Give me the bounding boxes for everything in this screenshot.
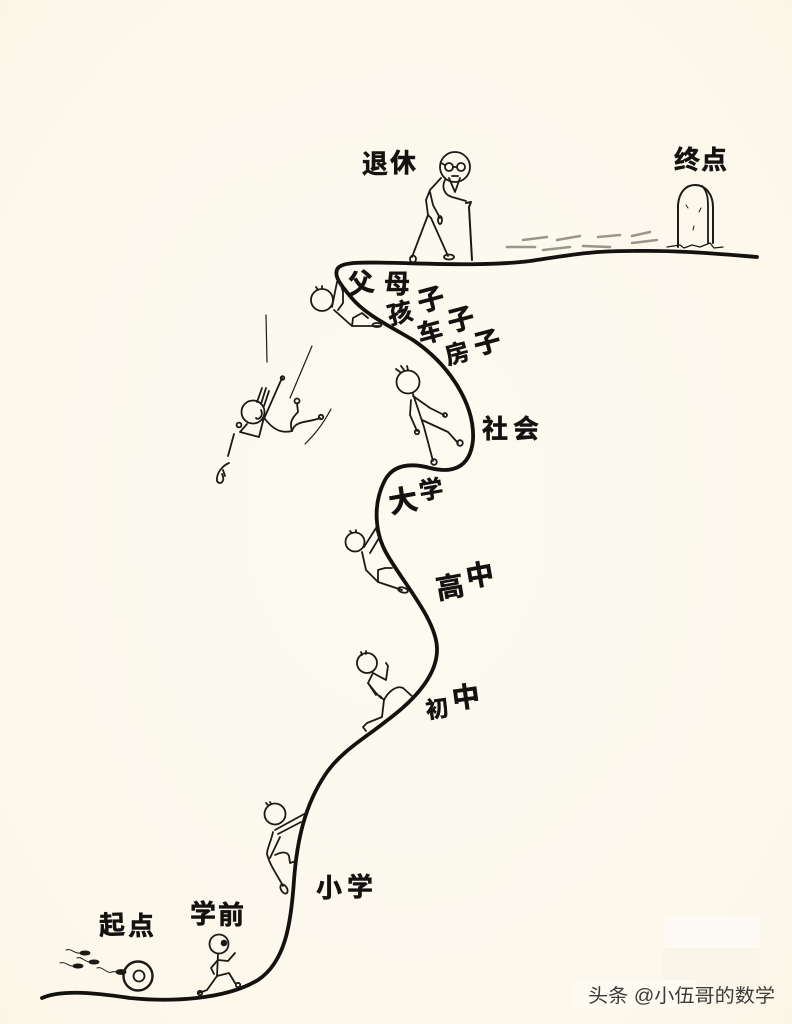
start label 起点: 起 xyxy=(98,910,126,940)
retirement label 退休: 休 xyxy=(390,148,416,178)
senior high label 高中: 中 xyxy=(463,558,496,593)
end label 终点: 点 xyxy=(701,145,727,175)
parents label 父母: 父 xyxy=(346,266,376,300)
child label 孩子 xyxy=(385,282,448,331)
parents label 父母 xyxy=(346,266,410,300)
start label 起点 xyxy=(98,910,154,941)
car label 车子: 子 xyxy=(444,302,478,338)
watermark text: 头条 @小伍哥的数学 xyxy=(588,985,775,1007)
retirement label 退休: 退 xyxy=(362,149,388,179)
junior high label 初中: 中 xyxy=(450,680,482,715)
society label 社会 xyxy=(482,414,539,444)
house label 房子 xyxy=(442,325,504,371)
watermark patches xyxy=(572,915,760,1008)
main life curve xyxy=(42,251,757,1000)
preschool label 学前 xyxy=(190,899,244,930)
icon: egg and sperm xyxy=(60,950,152,990)
figure: junior high climber xyxy=(357,651,413,731)
end label 终点: 终 xyxy=(674,145,700,175)
figure: senior high climber xyxy=(346,528,408,594)
university label 大学: 大 xyxy=(386,483,420,520)
primary school label 小学: 学 xyxy=(347,872,373,902)
preschool label 学前: 学 xyxy=(190,899,216,929)
university label 大学: 学 xyxy=(417,475,445,506)
society label 社会: 社 xyxy=(482,414,508,444)
start label 起点: 点 xyxy=(128,911,154,941)
figure: falling person xyxy=(217,315,331,483)
icon: tombstone xyxy=(667,185,723,248)
parents label 父母: 母 xyxy=(384,269,410,299)
figure: climber on overhang xyxy=(311,279,382,327)
house label 房子: 子 xyxy=(470,325,504,361)
car label 车子 xyxy=(415,302,478,350)
figure: society walker xyxy=(396,366,463,465)
preschool label 学前: 前 xyxy=(218,900,244,930)
car label 车子: 车 xyxy=(415,316,446,350)
figure: primary school climber xyxy=(264,802,306,895)
figure: preschool runner xyxy=(198,934,240,995)
university label 大学 xyxy=(386,475,445,520)
senior high label 高中 xyxy=(434,558,496,605)
child label 孩子: 孩 xyxy=(385,297,416,331)
end label 终点 xyxy=(674,145,727,175)
senior high label 高中: 高 xyxy=(434,570,467,605)
figure: retired old man with cane xyxy=(410,152,472,262)
footprints xyxy=(507,232,657,250)
child label 孩子: 子 xyxy=(414,282,448,318)
primary school label 小学: 小 xyxy=(316,873,342,903)
junior high label 初中: 初 xyxy=(424,695,450,723)
society label 社会: 会 xyxy=(513,414,539,444)
retirement label 退休 xyxy=(362,148,416,179)
house label 房子: 房 xyxy=(442,338,472,371)
junior high label 初中 xyxy=(424,680,482,723)
primary school label 小学 xyxy=(316,872,373,903)
